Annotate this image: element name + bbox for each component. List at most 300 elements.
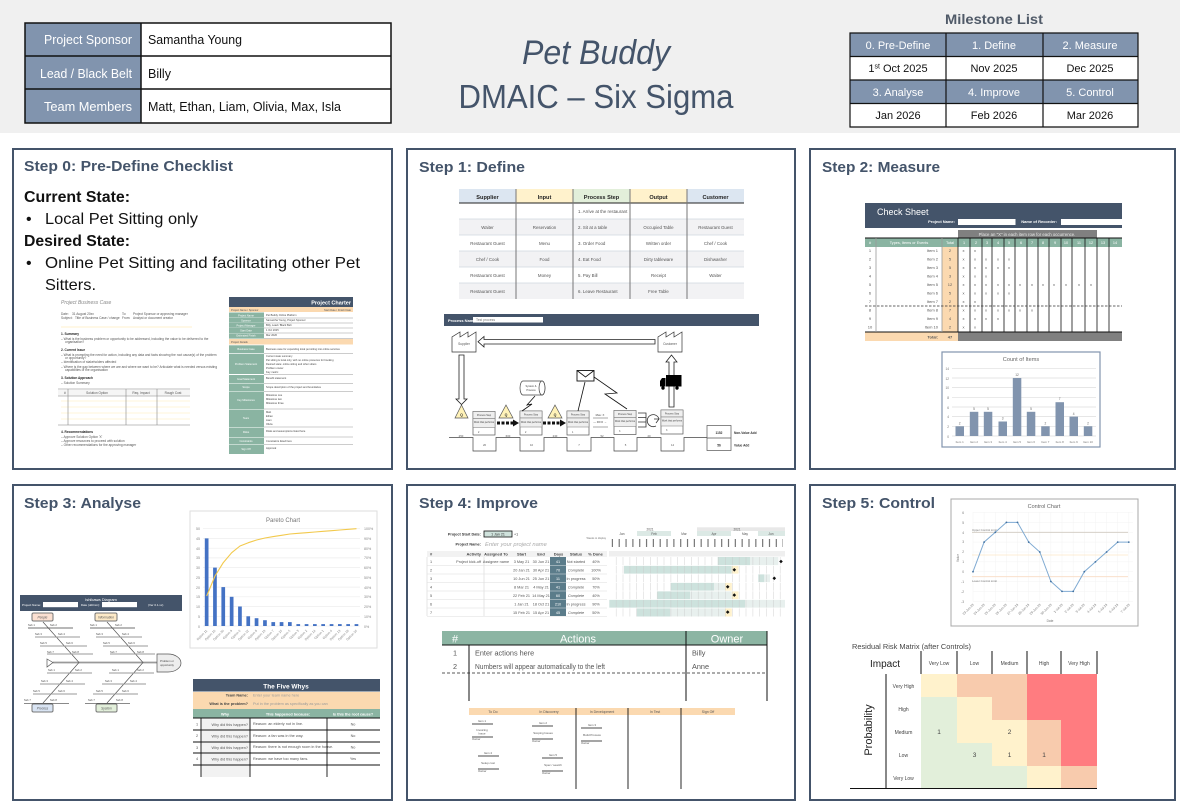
check sheet: 3	[986, 241, 988, 245]
value stream map: 20	[483, 443, 486, 447]
document: project business case: Req. Impact	[132, 391, 150, 395]
check sheet: 5	[869, 282, 872, 287]
gantt chart: #	[430, 552, 433, 556]
value stream map: Work that performs	[474, 421, 495, 424]
gantt chart: Feb	[651, 532, 657, 536]
five whys table: The Five Whys	[263, 684, 309, 690]
SIPOC table: Receipt	[651, 273, 667, 278]
control chart: 3	[962, 540, 964, 544]
value add totals: Non-Value Add	[734, 431, 757, 435]
SIPOC table: Input	[538, 195, 551, 201]
supermarket and loop	[638, 413, 659, 427]
check sheet: #	[869, 241, 872, 245]
pareto chart: 20	[196, 586, 200, 590]
project info table: Billy	[148, 66, 171, 81]
control chart: 24-Jun-23	[973, 603, 986, 616]
document: project business case: From:	[122, 316, 130, 320]
current and desired state text: •	[26, 211, 32, 228]
five whys table: Why did this happen?	[211, 758, 248, 762]
five whys table: 4	[196, 757, 198, 761]
timeline	[449, 438, 707, 451]
pareto chart: 30%	[364, 595, 372, 599]
document: project charter: Sign Off	[241, 447, 251, 451]
five whys table: Enter your team name here	[253, 694, 299, 698]
check sheet: 7	[869, 299, 872, 304]
residual risk matrix: Low	[970, 661, 979, 667]
control chart: 6-Jul-23	[1108, 603, 1119, 614]
check sheet: 47	[948, 334, 953, 340]
pareto chart: Option 5	[280, 629, 292, 640]
document: project charter: Samantha Young, Project Sponsor	[266, 318, 306, 322]
control chart: 5	[962, 521, 964, 525]
gantt chart: Start	[517, 552, 527, 556]
residual risk matrix: Very Low	[893, 776, 914, 782]
document: project business case: Analyst or document creator	[133, 316, 174, 320]
push arrows	[497, 420, 566, 426]
gantt chart: 70	[556, 568, 560, 572]
category boxes	[32, 613, 117, 712]
milestone list: st	[874, 64, 880, 70]
gantt chart: In progress	[566, 602, 586, 606]
five whys table: Reason: a fan was in the way.	[253, 734, 303, 738]
value stream map: Work that performs	[662, 420, 683, 422]
check sheet: Item 9	[927, 316, 939, 321]
check sheet: 4	[949, 316, 952, 321]
document: project charter: Desired state: online sitting and other sitters	[266, 362, 317, 366]
gantt timeline header	[609, 527, 697, 531]
pareto chart: Option 10	[204, 629, 217, 641]
cause labels: Sub 1	[112, 668, 119, 672]
document: project charter: Key metric	[266, 370, 279, 374]
SIPOC table: 3. Order Food	[578, 241, 606, 246]
gantt chart: 14 May 21	[532, 594, 550, 598]
gantt column headers	[427, 551, 607, 557]
document: project charter: Project Charter	[311, 300, 352, 306]
value stream map: Work that performs	[615, 420, 636, 423]
gantt chart: In progress	[566, 577, 586, 581]
gantt chart: 4	[430, 586, 432, 590]
gantt chart: 100%	[591, 568, 601, 572]
control chart: Lower Control Limit	[972, 579, 997, 583]
check sheet: Item 4	[927, 274, 939, 278]
five whys table: Reason: an elderly not in line.	[253, 722, 303, 726]
SIPOC table: Money	[538, 273, 552, 278]
gantt chart: 40%	[592, 594, 600, 598]
control chart: Upper Control Limit	[972, 528, 997, 532]
document: project charter: Milestone three	[266, 401, 284, 405]
kanban board: Issue	[479, 732, 486, 736]
document: project charter: Approval	[266, 446, 277, 450]
arrow: supplier down	[456, 355, 467, 404]
control chart: 0	[962, 570, 964, 574]
kanban board: Owner	[472, 737, 481, 741]
kanban board: Owner	[542, 771, 551, 775]
icon: supplier factory	[452, 332, 476, 352]
bar chart: count of items: 0	[947, 435, 949, 439]
check sheet: xx	[962, 248, 976, 253]
document: project charter: Estimated Finish	[236, 334, 256, 338]
residual risk matrix: 1	[1042, 752, 1046, 759]
control chart: 1	[962, 560, 964, 564]
document: project charter: Milestone two	[266, 397, 282, 401]
value stream map: Process Step	[618, 413, 633, 416]
check sheet: 5	[949, 265, 952, 270]
residual risk matrix: Medium	[895, 730, 912, 736]
document: project charter: Milestone one	[266, 393, 283, 397]
SIPOC table: 2. Sit at a table	[578, 225, 608, 230]
milestone list: 3. Analyse	[873, 87, 923, 99]
value stream map: 230	[553, 434, 558, 438]
milestone list: 1. Define	[972, 40, 1016, 52]
check sheet: xx	[962, 299, 976, 304]
residual risk matrix: Very High	[1068, 661, 1090, 667]
document: project charter: Risks	[243, 430, 250, 434]
five whys table	[193, 679, 380, 777]
gantt chart: 6	[430, 602, 432, 606]
document: project charter: Sponsor	[241, 318, 251, 322]
SIPOC table: 6. Leave Restaurant	[578, 289, 618, 294]
five whys table: Why did this happen?	[211, 734, 248, 738]
residual risk matrix: Very Low	[929, 661, 950, 667]
check sheet: Check Sheet	[877, 207, 929, 217]
pareto chart: 80%	[364, 547, 372, 551]
value add totals	[707, 426, 757, 450]
document: project charter: Liam	[266, 418, 272, 422]
check sheet: 3	[949, 274, 952, 278]
SIPOC table: Reservation	[533, 225, 557, 230]
cause labels: Sub 7	[88, 698, 95, 702]
check sheet: 2	[949, 299, 952, 304]
heading: step 4: Step 4: Improve	[419, 495, 538, 512]
panel: step 4 improve	[407, 485, 795, 800]
check sheet: Types, Items or Events	[890, 241, 928, 245]
pareto chart: 60%	[364, 566, 372, 570]
gantt chart: Project kick-off	[456, 560, 482, 564]
actions table: #	[452, 634, 459, 646]
check sheet: xxxx	[962, 316, 999, 321]
gantt chart: +1	[514, 532, 518, 536]
SIPOC table: Dishwasher	[704, 257, 728, 262]
gantt chart: Jun	[768, 532, 774, 536]
gantt chart: Complete	[568, 611, 584, 615]
milestone list: Milestone List	[945, 11, 1043, 27]
SIPOC table: Restaurant Guest	[470, 241, 505, 246]
milestone list: 5. Control	[1066, 87, 1114, 99]
control chart: 23-Jun-23	[962, 603, 975, 616]
value stream map: Process Name:	[448, 318, 477, 323]
residual risk matrix: 1	[1008, 752, 1012, 759]
ribs	[24, 628, 135, 703]
current and desired state text	[24, 189, 361, 294]
gantt chart: 15 Feb 21	[513, 611, 530, 615]
value add totals: 1152	[716, 431, 723, 435]
gantt chart: May	[742, 532, 748, 536]
current and desired state text: Current State:	[24, 189, 130, 206]
control chart: 3-Jul-23	[1075, 603, 1086, 614]
pareto chart: Option 3	[288, 629, 300, 640]
SIPOC table: Food	[539, 257, 550, 262]
bar chart: count of items: Item 3	[984, 440, 992, 444]
current and desired state text: Sitters.	[45, 277, 96, 294]
current and desired state text: Desired State:	[24, 233, 130, 250]
check sheet: 6	[869, 290, 872, 296]
control chart: 1-Jul-23	[1053, 603, 1064, 614]
gantt chart: Project Start Date:	[448, 532, 481, 536]
five whys table: 3	[196, 746, 198, 750]
residual risk matrix: Residual Risk Matrix (after Controls)	[852, 642, 971, 651]
cause labels: Sub 4	[122, 632, 129, 636]
five whys table: No	[351, 722, 355, 726]
gantt chart: Assignee name	[483, 560, 509, 564]
pareto chart: 40%	[364, 586, 372, 590]
gantt chart: Status	[570, 552, 583, 556]
title	[458, 34, 734, 115]
value stream map: 250	[459, 434, 464, 438]
icon: envelope	[577, 370, 594, 381]
value add totals: 56	[717, 444, 721, 448]
fishbone diagram: Ishikawa Diagram	[85, 597, 118, 602]
fishbone diagram	[20, 595, 182, 712]
project info table: Samantha Young	[148, 32, 242, 47]
residual risk matrix	[850, 642, 1097, 789]
document: project business case: – Approve Solution Option 'X'	[61, 435, 103, 439]
document: project charter: Benefit statement	[266, 376, 286, 380]
document: project charter: Scope	[242, 385, 250, 389]
pareto chart: 5	[198, 615, 200, 619]
check sheet: 14	[1113, 241, 1117, 245]
check sheet: Project Name:	[928, 219, 955, 224]
check sheet: 13	[1101, 241, 1105, 245]
value stream map: 2	[525, 431, 527, 434]
document: project business case: Title of Business Case / change	[75, 316, 120, 320]
value add totals: Value Add	[734, 444, 749, 448]
SIPOC table: Restaurant Guest	[470, 289, 505, 294]
milestone list: Mar 2026	[1067, 110, 1113, 122]
check sheet: 5	[1008, 241, 1010, 245]
check sheet: Item 3	[927, 265, 939, 270]
control chart: 7-Jul-23	[1120, 603, 1131, 614]
panel: step 0 pre-define checklist	[13, 149, 392, 469]
kanban board: In Development	[590, 710, 614, 714]
document: project charter: Mar 2026	[266, 333, 278, 337]
five whys table: 1	[196, 722, 198, 726]
cause labels: Sub 6	[122, 689, 129, 693]
document: project charter: Pet sitting is local only, with no online presence for booking	[266, 358, 334, 362]
milestone list: Oct 2025	[880, 63, 928, 75]
gantt chart: 3	[430, 577, 432, 581]
residual risk matrix: 1	[937, 729, 941, 736]
value stream map: Q	[460, 413, 463, 417]
value stream map: Process Step	[477, 414, 492, 417]
residual risk matrix: High	[898, 707, 909, 713]
document: project charter: Pet Buddy Online Platform	[266, 313, 297, 317]
gantt chart: 4 May 21	[533, 586, 549, 590]
actions table	[442, 631, 767, 701]
document: project business case: Rough Cost	[165, 391, 182, 395]
spine and main bones	[43, 622, 157, 703]
arrow: box to envelope	[578, 382, 585, 411]
SIPOC table: Output	[649, 195, 668, 201]
check sheet: 10	[1064, 241, 1068, 245]
SIPOC table: Supplier	[476, 195, 500, 201]
document: project business case: – Identification of stakeholders affected	[61, 360, 116, 364]
bar chart: count of items: 3	[1002, 416, 1004, 420]
document: project charter: Project Manager	[236, 324, 256, 328]
value stream map: 52	[600, 434, 604, 438]
bar chart: count of items: 5	[987, 407, 989, 411]
bar chart: count of items: Item 7	[1041, 440, 1050, 444]
document: project charter: Start Date / Finish Date	[324, 308, 352, 312]
check sheet: 5	[949, 256, 952, 262]
gantt chart: 8 Mar 21	[514, 586, 529, 590]
check sheet: xxxxxxxxxxxx	[962, 282, 1092, 287]
actions table: 2	[453, 662, 457, 671]
SIPOC table: Written order	[646, 241, 672, 246]
kanban board: Scoping Issues	[533, 731, 553, 735]
gantt chart: 2021	[733, 528, 741, 532]
fishbone diagram: (Ver 0.1.xx)	[148, 603, 163, 607]
residual risk matrix: 2	[1008, 729, 1012, 736]
control chart: 5-Jul-23	[1097, 603, 1108, 614]
gantt bars	[609, 557, 764, 616]
value stream map	[444, 314, 759, 451]
SIPOC table: Chef / Cook	[476, 257, 500, 262]
control chart: 28-Jun-23	[1017, 603, 1030, 616]
SIPOC table: Restaurant Guest	[698, 225, 733, 230]
SIPOC table: Waiter	[709, 273, 722, 278]
bar chart: count of items: Item 8	[1056, 440, 1064, 444]
check sheet: 6	[1020, 241, 1022, 245]
project info table: Team Members	[44, 99, 132, 114]
bar chart: count of items: Item 4	[999, 440, 1007, 444]
document: project charter: Risks and assumptions listed here	[266, 429, 306, 433]
five whys table: Why did this happen?	[211, 746, 248, 750]
pareto chart: Option 6	[230, 629, 242, 640]
control chart: 25-Jun-23	[984, 603, 997, 616]
fish head	[157, 654, 181, 672]
document: project business case: or opportunity?	[65, 356, 86, 360]
value stream map: 14	[671, 443, 674, 447]
cause labels: Sub 7	[47, 650, 54, 654]
kanban board: Owner	[532, 739, 541, 743]
kanban board: To Do	[488, 710, 498, 714]
SIPOC table: 4. Eat Food	[578, 257, 601, 262]
check sheet: 9	[1054, 241, 1056, 245]
supply signal: — FIFO →	[593, 420, 607, 424]
cause labels: Sub 4	[58, 632, 65, 636]
gantt chart: Mar	[681, 532, 688, 536]
cause labels: Sub 3	[96, 632, 103, 636]
check sheet: 4	[869, 274, 872, 278]
check sheet: 11	[1077, 241, 1081, 245]
gantt chart: Jan	[619, 532, 625, 536]
cause labels: Sub 5	[40, 641, 47, 645]
gantt chart: 25 Jun 21	[533, 577, 549, 581]
check sheet: 1	[963, 241, 965, 245]
check sheet: 7	[949, 308, 952, 312]
cause labels: Sub 8	[72, 650, 79, 654]
check sheet: Item 5	[927, 282, 939, 287]
pareto chart: 20%	[364, 605, 372, 609]
SIPOC table: 1. Arrive at the restaurant	[578, 209, 628, 214]
control chart: Control Chart	[1028, 504, 1061, 510]
gantt chart: 40%	[592, 560, 600, 564]
milestone list	[850, 11, 1138, 127]
fishbone diagram: Information	[98, 616, 114, 620]
pareto chart: Option 7	[263, 629, 275, 640]
control chart: 27-Jun-23	[1006, 603, 1019, 616]
pareto chart: 50	[196, 527, 200, 531]
gantt chart: Complete	[568, 568, 584, 572]
five whys table: Why	[221, 712, 230, 716]
document: project business case: – What is prompting the need for action, including any data and facts showing the root cause(s) of the problem	[61, 353, 217, 357]
gantt chart: Complete	[568, 586, 584, 590]
cause labels: Sub 5	[96, 689, 103, 693]
check sheet: 4	[997, 241, 999, 245]
document: project business case: 1. Summary	[61, 332, 79, 336]
document: project charter: Matt	[266, 410, 271, 414]
milestone list: 1	[868, 63, 874, 75]
panel: step 3 analyse	[13, 485, 392, 800]
SIPOC table: Menu	[539, 241, 551, 246]
gantt chart: Not started	[567, 560, 585, 564]
lightning connectors	[522, 377, 627, 411]
control chart: Date	[1047, 619, 1054, 623]
control chart: -1	[961, 580, 964, 584]
document: project charter: Constraints listed here	[266, 439, 292, 443]
fishbone diagram: Date (dd/mm):	[81, 603, 100, 607]
document: project business case: capabilities of the organisation	[65, 368, 108, 372]
gantt chart: Activity	[467, 552, 482, 556]
SIPOC table: 5. Pay Bill	[578, 273, 598, 278]
gantt chart: 5	[430, 594, 432, 598]
pareto chart: Option 4	[322, 629, 333, 640]
gantt chart: 50%	[592, 577, 600, 581]
value stream map: 5	[625, 443, 627, 447]
kanban board: Owner	[581, 741, 590, 745]
SIPOC table: Waiter	[481, 225, 494, 230]
bar chart: count of items: Item 5	[1013, 440, 1021, 444]
pareto chart: Pareto Chart	[266, 518, 300, 524]
current and desired state text: •	[26, 255, 32, 272]
five whys table: Is this the root cause?	[333, 712, 374, 716]
header band	[0, 0, 1180, 133]
five whys table: Yes	[350, 757, 356, 761]
pareto chart: 0%	[364, 625, 370, 629]
control chart: 29-Jun-23	[1029, 603, 1042, 616]
actions table: 1	[453, 648, 457, 658]
pareto chart: 30	[196, 566, 200, 570]
kanban board: Invoicing	[476, 728, 488, 732]
milestone list: 2. Measure	[1062, 40, 1118, 52]
heading: step 5: Step 5: Control	[822, 495, 935, 512]
value stream map: Test process	[476, 318, 495, 322]
SIPOC table	[459, 189, 744, 299]
milestone list: Dec 2025	[1066, 63, 1114, 75]
value stream map: 10	[530, 443, 533, 447]
residual risk matrix: Medium	[1001, 661, 1018, 667]
cause labels: Sub 1	[90, 623, 97, 627]
check sheet: 9	[869, 316, 872, 321]
document: project business case: – What is the business problem or opportunity to be addressed, including the value to be delivered to the	[61, 337, 209, 341]
bar chart: count of items: Item 2	[970, 440, 978, 444]
kanban board: Owner	[478, 769, 487, 773]
gantt chart: End	[537, 552, 545, 556]
gantt chart: % Done	[588, 552, 604, 556]
fish head: opportunity	[160, 663, 175, 667]
cause labels: Sub 7	[110, 650, 117, 654]
residual risk matrix: High	[1039, 661, 1049, 667]
